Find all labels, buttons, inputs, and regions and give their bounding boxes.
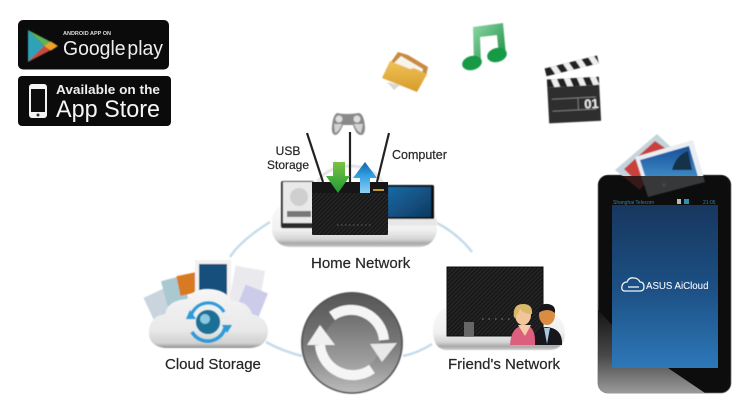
panel: home network — [267, 132, 447, 272]
icon: woman — [510, 304, 535, 345]
clapper number: 01 — [584, 96, 599, 112]
label: Computer: Computer — [392, 148, 447, 162]
icon: Google Play triangle — [28, 30, 58, 62]
status bar: 21:05 — [703, 200, 716, 206]
icon: man — [532, 304, 562, 345]
tablet bezel gloss — [598, 310, 705, 393]
label: USB Storage: USB — [276, 144, 300, 158]
router antennas — [307, 132, 389, 182]
tablet camera — [662, 183, 666, 187]
badge wordmark: App Store — [56, 96, 160, 123]
panel: cloud storage — [144, 260, 268, 373]
cloud shape — [149, 289, 268, 348]
friend's cloud base — [433, 305, 565, 350]
status bar: Shanghai Telecom — [613, 200, 654, 206]
laptop — [386, 185, 437, 226]
panel: friend's network — [433, 267, 565, 373]
badge small text: ANDROID APP ON — [63, 31, 111, 37]
status bar — [613, 199, 716, 206]
icon: sync circle — [301, 292, 403, 394]
icon: phone — [29, 84, 47, 118]
label: Cloud Storage: Cloud Storage — [165, 356, 261, 373]
arrow: blue upload — [353, 162, 377, 193]
icon: folder — [382, 52, 428, 92]
badge: Google Play — [18, 20, 169, 70]
text: ASUS AiCloud: ASUS AiCloud — [646, 281, 708, 292]
tablet screen — [612, 205, 718, 368]
router — [312, 182, 388, 235]
friend's router — [447, 267, 543, 336]
badge: App Store — [18, 76, 171, 126]
photos above tablet — [615, 134, 704, 176]
badge wordmark: Google — [63, 37, 129, 60]
label: USB Storage: Storage — [267, 158, 309, 172]
tablet body — [598, 175, 731, 393]
label: Home Network: Home Network — [311, 255, 411, 272]
connecting network ring — [230, 222, 472, 356]
badge small text: Available on the — [56, 83, 160, 97]
arrow: green download — [326, 162, 350, 193]
icon: AiCloud cloud — [622, 278, 644, 291]
photos dimmed through tablet glass — [622, 176, 705, 198]
label: Friend's Network: Friend's Network — [448, 356, 561, 373]
logo: ASUS AiCloud — [622, 278, 708, 292]
icon: globe with sync arrows — [186, 303, 232, 341]
panel: tablet — [598, 134, 731, 393]
faint cloud behind router — [316, 166, 384, 214]
icon: game controller — [332, 113, 365, 135]
icon: music note — [461, 23, 508, 72]
icon: film clapper — [545, 55, 601, 123]
USB hard drive — [281, 181, 314, 228]
documents fanned behind cloud — [144, 260, 268, 321]
badge wordmark: play — [127, 37, 164, 60]
home network cradle — [272, 203, 437, 247]
